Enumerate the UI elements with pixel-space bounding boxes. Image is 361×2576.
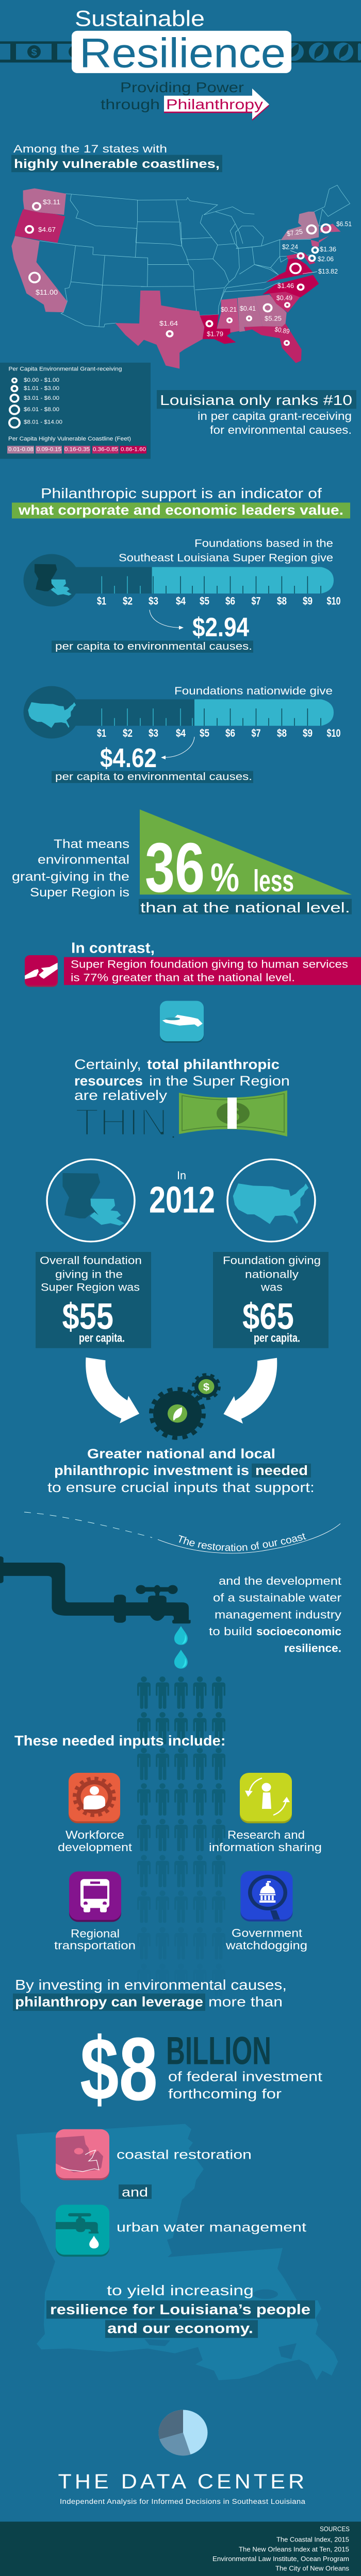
input: research and information sharing: information sharing: [209, 1841, 322, 1854]
8 billion figure: $8: [80, 2019, 158, 2119]
scale labels: $6: [225, 727, 235, 739]
8 billion figure: forthcoming for: [168, 2086, 282, 2102]
coastline colour scale: 0.09-0.15: [37, 446, 61, 453]
Louisiana rank callout: Louisiana only ranks #10: [160, 393, 352, 409]
coastline colour scale: 0.01-0.08: [8, 446, 34, 453]
8 billion figure: [80, 2019, 323, 2119]
arrows into gears: [86, 1358, 277, 1423]
scale labels: $1: [97, 595, 106, 607]
logo text: [58, 2469, 306, 2506]
closing message: [46, 2283, 315, 2338]
8 billion figure: of federal investment: [168, 2069, 323, 2084]
36 percent less section: less: [253, 864, 294, 898]
2012 comparison circles: In: [177, 1169, 186, 1182]
logo: pie chart: [158, 2410, 207, 2455]
closing message: resilience for Louisiana’s people: [50, 2302, 310, 2318]
thin resources text: resources: [74, 1073, 143, 1089]
urban water management row: [56, 2205, 307, 2257]
footer: sources: [0, 2522, 361, 2575]
36 percent less section: 36: [145, 828, 205, 907]
scale labels: $5: [200, 595, 209, 607]
logo text: THE DATA CENTER: [58, 2469, 304, 2493]
investment needed text: to ensure crucial inputs that support:: [47, 1480, 315, 1495]
input: workforce development: development: [58, 1841, 133, 1854]
background Louisiana map: [17, 2124, 338, 2380]
value: $4.62: [100, 743, 157, 773]
investment needed text: Greater national and local: [87, 1446, 275, 1461]
intro text: Among the 17 states with: [13, 143, 167, 155]
scale labels: $5: [200, 727, 209, 739]
water management text: of a sustainable water: [213, 1591, 341, 1604]
water management text: [209, 1574, 342, 1655]
tick marks: [102, 576, 321, 594]
scale labels: $9: [303, 727, 313, 739]
8 billion figure: BILLION: [166, 2028, 271, 2073]
icon: giving hand: [160, 1001, 204, 1043]
thermometer: Super Region: Foundations based in the: [194, 537, 333, 549]
rings: [26, 203, 330, 345]
filled coastal states: [11, 189, 341, 369]
state values: $1.46: [277, 282, 294, 290]
thermometer: nationwide: Foundations nationwide give: [174, 685, 333, 697]
Louisiana ring: [47, 1159, 135, 1242]
state values: $0.49: [276, 294, 292, 301]
scale labels: $2: [123, 727, 133, 739]
Louisiana silhouette: [35, 564, 72, 596]
state values: [36, 198, 352, 337]
legend ring labels: $6.01 - $8.00: [24, 406, 59, 413]
state values: $5.25: [265, 315, 282, 323]
scale labels: $3: [149, 727, 158, 739]
scale labels: [97, 727, 340, 739]
state values: $1.36: [320, 246, 336, 253]
state values: $0.89: [274, 326, 290, 335]
state values: $0.41: [240, 304, 256, 312]
scale labels: $6: [225, 595, 235, 607]
philanthropic support heading: what corporate and economic leaders value.: [18, 502, 343, 518]
state values: $1.64: [159, 319, 178, 327]
lead-in text: [12, 837, 129, 900]
state values: $7.25: [286, 228, 303, 238]
panel: national giving: nationally: [245, 1268, 299, 1280]
icon: tap: [56, 2205, 109, 2257]
people background grid: [137, 1676, 225, 1996]
icon: info with arrows: [240, 1773, 292, 1823]
investment needed text: philanthropic investment is: [54, 1463, 249, 1478]
icon: coast: [56, 2129, 109, 2180]
input: regional transportation: transportation: [54, 1939, 136, 1952]
lead-in text: That means: [54, 837, 129, 851]
icon: thin dollar bill: $: [227, 1102, 240, 1126]
input: research and information sharing: Research and: [227, 1828, 305, 1841]
legend panel: [0, 363, 151, 459]
philanthropic support heading: Philanthropic support is an indicator of: [41, 486, 322, 502]
input: workforce development: [58, 1773, 133, 1854]
thin resources text: THIN: [75, 1100, 168, 1144]
Louisiana rank callout: [157, 390, 356, 436]
icon: thin dollar bill: [179, 1090, 287, 1137]
thin resources text: are relatively: [74, 1088, 167, 1103]
panel: national giving: was: [260, 1281, 283, 1293]
tick marks: [102, 708, 321, 726]
philanthropic support heading: [12, 486, 350, 518]
thin resources text: total philanthropic: [147, 1057, 280, 1072]
coastline colour scale: [7, 446, 146, 453]
state values: $2.06: [318, 255, 334, 263]
icon: gears: [151, 1375, 220, 1438]
lead-in text: Super Region is: [30, 886, 129, 900]
input: regional transportation: [54, 1871, 136, 1952]
scale labels: $8: [277, 595, 287, 607]
panel: Super Region giving: $55: [62, 1296, 113, 1337]
footer: sources: The Coastal Index, 2015: [276, 2536, 349, 2544]
title: Resilience: [79, 30, 286, 76]
water management text: socioeconomic: [256, 1625, 341, 1638]
subtitle with arrow: Providing Power: [120, 80, 244, 96]
footer: sources: Environmental Law Institute, Ocean Program: [212, 2555, 349, 2563]
US silhouette: [28, 702, 76, 728]
map of coastal states: [11, 185, 352, 369]
title: [72, 7, 291, 76]
scale labels: $3: [149, 595, 158, 607]
arrow: [150, 610, 179, 628]
closing message: and our economy.: [107, 2320, 253, 2336]
intro text: [11, 143, 222, 172]
panel: national giving: $65: [242, 1296, 294, 1337]
coast line with curved text: The restoration of our coast: [178, 1533, 306, 1551]
state values: $6.51: [336, 220, 352, 228]
panel: national giving: Foundation giving: [223, 1254, 321, 1266]
icon: hands: [25, 955, 58, 987]
scale labels: $10: [327, 727, 340, 739]
panel: national giving: per capita.: [254, 1331, 300, 1345]
intro text: highly vulnerable coastlines,: [14, 157, 220, 171]
subtitle with arrow: Philanthropy: [166, 97, 264, 113]
footer: sources: The New Orleans Index at Ten, 2015: [239, 2546, 349, 2553]
legend ring labels: $3.01 - $6.00: [24, 395, 59, 401]
legend ring labels: $8.01 - $14.00: [24, 419, 62, 425]
contrast panel: [25, 940, 361, 987]
contrast panel: is 77% greater than at the national level.: [71, 971, 295, 984]
title: Sustainable: [75, 7, 205, 31]
icon: gears: $: [203, 1381, 209, 1393]
Louisiana rank callout: for environmental causes.: [210, 423, 352, 436]
green wedge: [140, 809, 352, 894]
scale labels: $4: [176, 595, 186, 607]
subtitle with arrow: through: [101, 97, 160, 113]
coastline colour scale: 0.16-0.35: [64, 446, 90, 453]
panel: Super Region giving: Overall foundation: [40, 1254, 142, 1266]
footer: sources: SOURCES: [320, 2526, 350, 2533]
scale labels: $9: [303, 595, 313, 607]
legend panel: Per Capita Environmental Grant-receiving: [8, 366, 122, 372]
36 percent less section: %: [210, 855, 239, 900]
state values: $3.11: [43, 198, 60, 206]
coastal restoration row: coastal restoration: [117, 2147, 252, 2162]
header band with bills and leaves: $: [31, 47, 37, 58]
state values: $1.79: [207, 330, 223, 337]
thermometer: Super Region: per capita to environmental causes.: [55, 640, 252, 652]
state values: $2.24: [282, 243, 298, 250]
US ring: [227, 1159, 315, 1242]
panel: Super Region giving: [36, 1252, 151, 1348]
leverage text: more than: [208, 1994, 283, 2009]
legend ring labels: $0.00 - $1.00: [24, 377, 59, 383]
panel: national giving: [213, 1252, 329, 1348]
coastal restoration row: [56, 2129, 252, 2180]
water management text: and the development: [219, 1574, 342, 1587]
water management text: management industry: [215, 1608, 341, 1621]
and label: and: [122, 2184, 148, 2199]
leverage text: By investing in environmental causes,: [15, 1977, 287, 1993]
inputs heading: These needed inputs include:: [14, 1733, 226, 1749]
coastline colour scale: 0.36-0.85: [93, 446, 118, 453]
arrow: [165, 737, 194, 757]
Louisiana rank callout: in per capita grant-receiving: [198, 410, 352, 422]
scale labels: $2: [123, 595, 133, 607]
scale labels: $8: [277, 727, 287, 739]
footer: sources: The City of New Orleans: [275, 2565, 349, 2572]
thermometer: nationwide: per capita to environmental causes.: [55, 771, 252, 783]
scale labels: $4: [176, 727, 186, 739]
thermometer: Super Region: Southeast Louisiana Super Region give: [119, 551, 333, 564]
leverage text: philanthropy can leverage: [15, 1994, 203, 2009]
input: government watchdogging: [225, 1871, 307, 1952]
state values: $11.00: [36, 289, 58, 297]
coastline colour scale: 0.86-1.60: [121, 446, 146, 453]
legend panel: Per Capita Highly Vulnerable Coastline (Feet): [8, 435, 131, 442]
input: regional transportation: Regional: [71, 1927, 120, 1940]
scale labels: $7: [252, 595, 261, 607]
investment needed text: needed: [255, 1463, 308, 1478]
thin resources text: Certainly,: [74, 1057, 141, 1072]
scale labels: [97, 595, 340, 607]
2012 comparison circles: 2012: [149, 1179, 215, 1221]
state values: $13.82: [318, 268, 338, 275]
icon: bus: [69, 1871, 121, 1922]
and label: [119, 2184, 152, 2199]
icon: gear with person: [69, 1773, 120, 1823]
logo text: Independent Analysis for Informed Decisions in Southeast Louisiana: [60, 2498, 306, 2506]
input: government watchdogging: watchdogging: [225, 1939, 307, 1952]
water management text: to build: [209, 1625, 252, 1638]
leader lines: [290, 250, 317, 274]
subtitle with arrow: [101, 80, 269, 121]
thin resources text: in the Super Region: [149, 1073, 290, 1089]
contrast panel: In contrast,: [71, 940, 155, 956]
2012 comparison circles: [47, 1159, 315, 1242]
scale labels: $7: [252, 727, 261, 739]
legend rings: [9, 379, 20, 428]
state values: $4.67: [38, 226, 56, 233]
thermometer: nationwide: [24, 685, 340, 783]
investment needed text: [47, 1446, 315, 1495]
urban water management row: urban water management: [117, 2219, 307, 2234]
panel: Super Region giving: Super Region was: [41, 1281, 140, 1293]
header band with bills and leaves: [0, 41, 361, 62]
state outlines: [40, 185, 350, 327]
panel: Super Region giving: giving in the: [55, 1268, 123, 1280]
36 percent less section: [12, 809, 352, 916]
thermometer: Super Region: [24, 537, 340, 653]
coast line with curved text: [24, 1512, 340, 1554]
thin resources text: [74, 1057, 290, 1144]
36 percent less section: than at the national level.: [140, 900, 350, 916]
scale labels: $1: [97, 727, 106, 739]
faucet with drops: [0, 1556, 191, 1669]
legend ring labels: [24, 377, 62, 425]
input: research and information sharing: [209, 1773, 322, 1854]
value: $2.94: [192, 613, 249, 642]
state values: $0.21: [221, 306, 237, 313]
input: government watchdogging: Government: [232, 1926, 303, 1939]
lead-in text: grant-giving in the: [12, 870, 129, 884]
input: workforce development: Workforce: [65, 1828, 124, 1841]
contrast panel: Super Region foundation giving to human services: [71, 958, 348, 970]
legend ring labels: $1.01 - $3.00: [24, 385, 59, 392]
water management text: resilience.: [284, 1641, 341, 1655]
icon: magnifier on capitol: [240, 1871, 293, 1921]
closing message: to yield increasing: [107, 2283, 254, 2299]
lead-in text: environmental: [38, 853, 129, 867]
panel: Super Region giving: per capita.: [79, 1331, 125, 1345]
scale labels: $10: [327, 595, 340, 607]
leverage text: [13, 1977, 287, 2011]
